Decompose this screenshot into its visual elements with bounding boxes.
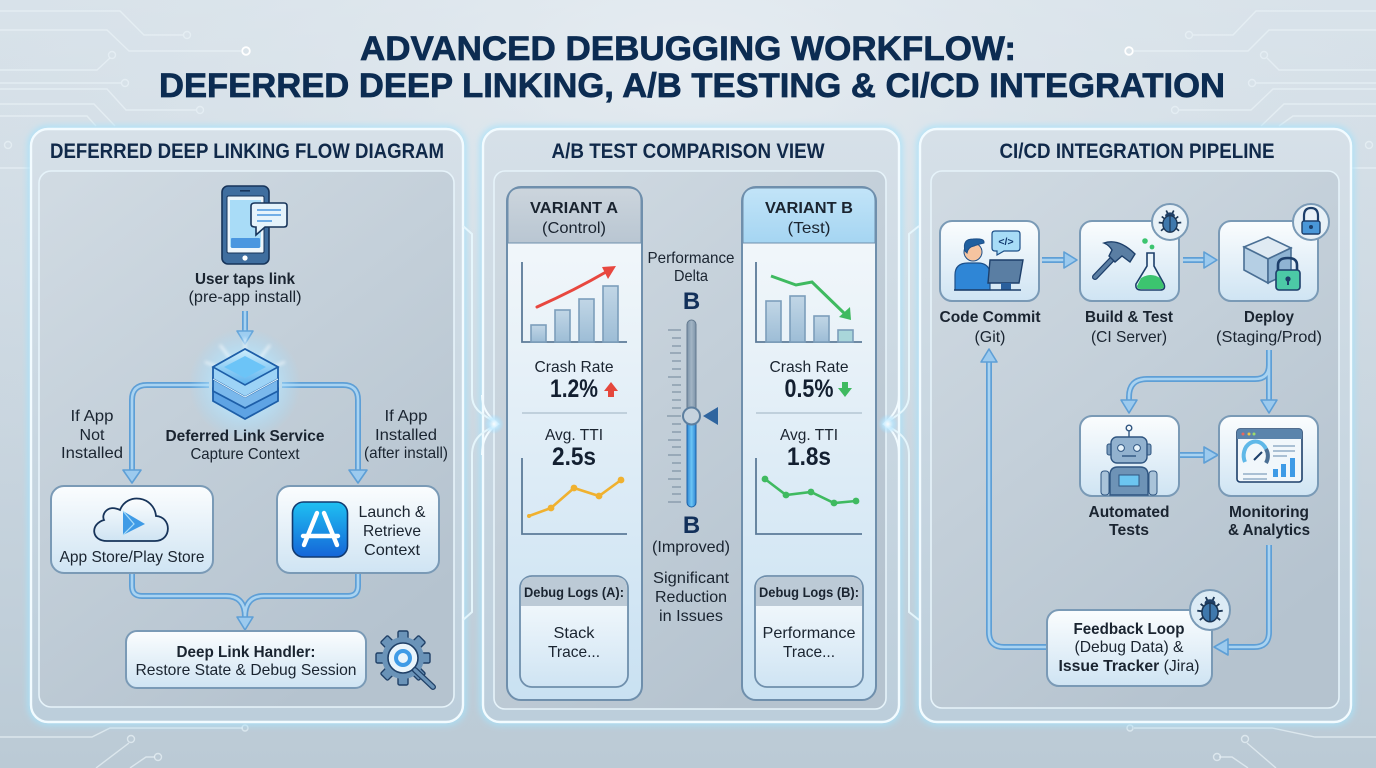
metric: crash rate a: [534, 359, 618, 403]
icon: glowing server stack: [189, 328, 301, 440]
label: build and test: Build & Test: [1085, 309, 1174, 326]
text: if app installed: [364, 408, 448, 462]
arrow: build to deploy: [1183, 252, 1217, 268]
card: feedback loop: (Debug Data) &: [1074, 639, 1184, 656]
text: significant reduction: Reduction: [655, 589, 727, 606]
card: variant a: [507, 187, 642, 700]
variant b header: (Test): [788, 220, 830, 237]
metric: avg tti a: Avg. TTI: [545, 427, 603, 444]
label: code commit: [940, 309, 1041, 346]
inner panel: [931, 171, 1339, 708]
text: improved: (Improved): [652, 539, 730, 556]
icon: cloud with play: [94, 499, 168, 541]
heading: ci/cd: CI/CD INTEGRATION PIPELINE: [1000, 140, 1274, 163]
variant a header: VARIANT A: [530, 200, 618, 217]
text: if app not installed: If App: [70, 408, 114, 425]
title: ADVANCED DEBUGGING WORKFLOW:: [360, 30, 1016, 68]
text: significant reduction: in Issues: [659, 608, 723, 625]
icon: gear with magnifier: [376, 631, 433, 687]
title: DEFERRED DEEP LINKING, A/B TESTING & CI/CD INTEGRATION: [159, 67, 1225, 105]
badge: lock: [1293, 204, 1329, 240]
card: variant b: [742, 187, 876, 700]
panel: ci/cd integration pipeline: [920, 129, 1351, 722]
label: code commit: (Git): [974, 329, 1006, 346]
panel: deferred deep linking flow diagram: [31, 129, 463, 722]
debug logs b: [755, 576, 863, 687]
debug logs b: Debug Logs (B):: [759, 584, 859, 600]
variant b header: VARIANT B: [765, 200, 853, 217]
card: launch and retrieve: Context: [364, 542, 421, 559]
debug logs a: Stack: [554, 625, 596, 642]
label: deploy: [1216, 309, 1322, 346]
label: automated tests: Tests: [1109, 522, 1149, 539]
text: significant reduction: Significant: [653, 570, 730, 587]
label: deploy: (Staging/Prod): [1216, 329, 1322, 346]
arrow: service to app store: [123, 385, 209, 483]
performance delta gauge: B: [683, 512, 700, 539]
label: monitoring and analytics: Monitoring: [1229, 504, 1309, 521]
metric: crash rate a: 1.2%: [550, 375, 598, 403]
text: deferred link service: Deferred Link Service: [166, 428, 325, 445]
heading: a/b test: A/B TEST COMPARISON VIEW: [552, 140, 825, 163]
debug logs b: Trace...: [783, 644, 835, 661]
chart: variant b crash bars: [756, 262, 862, 342]
text: user taps link: User taps link: [195, 271, 295, 288]
icon: developer at computer: [954, 231, 1023, 290]
inner panel: [494, 171, 886, 709]
arrow: tap to service: [237, 311, 253, 344]
metric: crash rate b: 0.5%: [784, 375, 834, 403]
arrow: commit to build: [1042, 252, 1077, 268]
text: performance delta: [648, 250, 735, 285]
arrow: merge to deep link handler: [132, 574, 358, 630]
arrow: automated tests to monitoring: [1180, 447, 1218, 463]
text: deferred link service: Capture Context: [190, 446, 300, 463]
slider knob and pointer: [683, 407, 718, 425]
badge: bug: [1152, 204, 1188, 240]
arrow: monitoring to feedback: [1214, 545, 1269, 655]
metric: avg tti a: 2.5s: [552, 443, 596, 471]
debug logs a: [520, 576, 628, 687]
node: monitoring and analytics: [1219, 416, 1318, 496]
debug logs b: Performance: [762, 625, 856, 642]
card: feedback loop: Issue Tracker (Jira): [1058, 658, 1200, 675]
text: if app installed: If App: [384, 408, 428, 425]
card: feedback loop: Feedback Loop: [1074, 621, 1185, 638]
panel: a/b test comparison view: [483, 129, 899, 722]
icon: hammer: [1095, 242, 1135, 277]
text: deferred link service: [166, 428, 325, 463]
text: performance delta: Delta: [674, 268, 708, 285]
metric: crash rate b: Crash Rate: [770, 359, 849, 376]
text: significant reduction: [653, 570, 730, 625]
metric: avg tti a: [545, 427, 603, 471]
variant a header: (Control): [542, 220, 606, 237]
label: code commit: Code Commit: [940, 309, 1041, 326]
text: performance delta: Performance: [648, 250, 735, 267]
text: if app installed: Installed: [375, 427, 437, 444]
chart: variant b tti line: [756, 458, 862, 534]
node: deploy: [1219, 204, 1329, 301]
badge: bug: [1190, 590, 1230, 630]
node: build and test: [1080, 204, 1188, 301]
card: launch and retrieve: Retrieve: [363, 523, 421, 540]
text: if app installed: (after install): [364, 445, 448, 462]
node: automated tests: [1080, 416, 1179, 496]
card: deep link handler: Deep Link Handler:: [176, 644, 316, 661]
metric: crash rate b: [770, 359, 852, 403]
variant b header: [743, 188, 875, 243]
icon: flask: [1136, 238, 1164, 290]
metric: avg tti b: [780, 427, 838, 471]
heading: deferred deep linking: DEFERRED DEEP LINKING FLOW DIAGRAM: [50, 140, 444, 163]
node: code commit: </>: [998, 236, 1014, 248]
icon: app store: [292, 502, 348, 557]
card: app store / play store: App Store/Play Store: [60, 549, 205, 566]
chart: variant a tti line: [522, 458, 627, 534]
card: launch and retrieve: [277, 486, 439, 573]
label: monitoring and analytics: & Analytics: [1228, 522, 1310, 539]
label: monitoring and analytics: [1228, 504, 1310, 539]
inner panel: [39, 171, 454, 707]
card: launch and retrieve: Launch &: [358, 504, 426, 521]
label: deploy: Deploy: [1244, 309, 1294, 326]
slider ticks: [667, 330, 681, 502]
label: automated tests: [1088, 504, 1170, 539]
text: if app not installed: [61, 408, 123, 462]
slider track: [687, 320, 696, 507]
metric: avg tti b: 1.8s: [787, 443, 831, 471]
debug logs a: Debug Logs (A):: [524, 584, 624, 600]
label: build and test: [1085, 309, 1174, 346]
text: user taps link: [188, 271, 302, 306]
card: deep link handler: [126, 631, 366, 688]
chart: variant a crash bars: [522, 262, 627, 342]
variant a header: [508, 188, 641, 243]
icon: dashboard: [1237, 429, 1302, 482]
arrow: service to launch: [282, 385, 367, 483]
icon: box with lock: [1244, 237, 1300, 290]
text: if app not installed: Installed: [61, 445, 123, 462]
arrow: deploy to automated tests and monitoring: [1121, 350, 1277, 413]
card: feedback loop: [1047, 590, 1230, 686]
node: code commit: [940, 221, 1039, 301]
text: if app not installed: Not: [80, 427, 105, 444]
card: deep link handler: Restore State & Debug Session: [136, 662, 356, 679]
label: build and test: (CI Server): [1091, 329, 1167, 346]
debug logs a: Trace...: [548, 644, 600, 661]
icon: robot: [1101, 425, 1157, 495]
performance delta gauge: B: [683, 288, 700, 315]
text: user taps link: (pre-app install): [188, 289, 302, 306]
connectors between panels: [463, 226, 919, 620]
performance delta gauge: [648, 250, 735, 625]
metric: avg tti b: Avg. TTI: [780, 427, 838, 444]
arrow: feedback back to commit: [981, 349, 1047, 647]
metric: crash rate a: Crash Rate: [534, 359, 614, 376]
title: [159, 30, 1225, 105]
card: app store / play store: [51, 486, 213, 573]
icon: phone with message: [222, 186, 287, 264]
label: automated tests: Automated: [1088, 504, 1170, 521]
